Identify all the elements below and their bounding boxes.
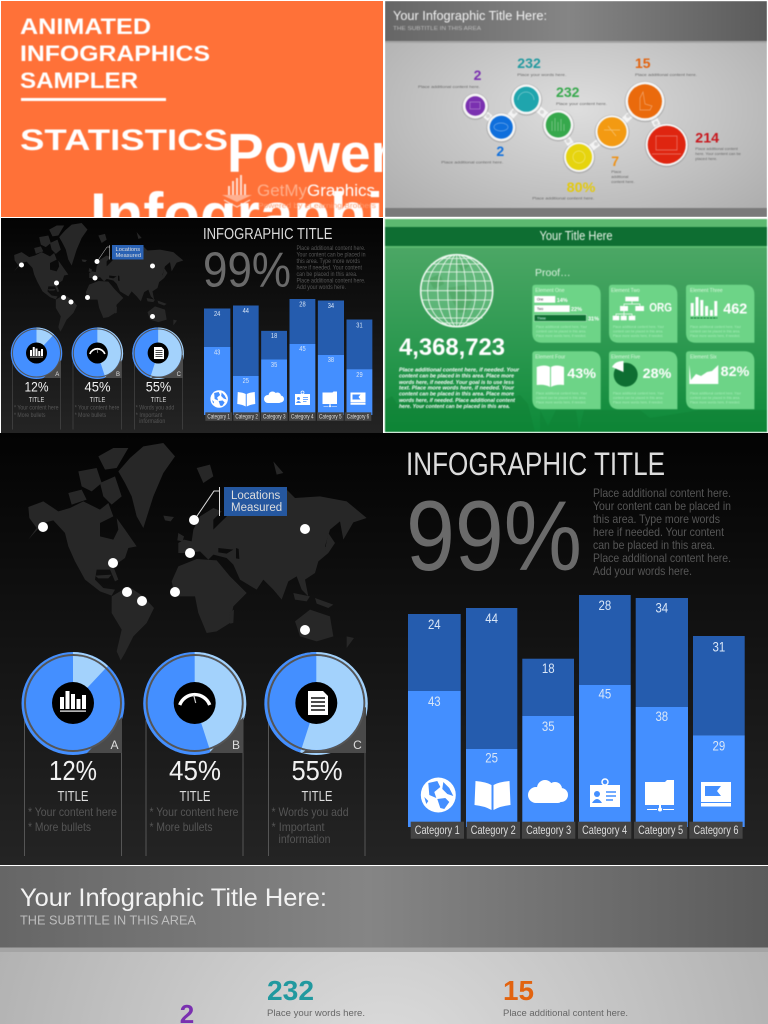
card: element four: Element Four xyxy=(535,354,566,360)
paragraph: words here, if needed. Place additional content xyxy=(399,398,515,404)
paragraph xyxy=(399,368,520,410)
label: teal 232 xyxy=(517,55,566,77)
paragraph: content can be placed in this area. Place more xyxy=(399,392,514,398)
stat B: TITLE xyxy=(180,788,210,805)
callout: locations measured xyxy=(197,487,287,516)
heading: infographic title: INFOGRAPHIC TITLE xyxy=(203,226,332,243)
label: blue 2 xyxy=(441,146,504,164)
paragraph: here if needed. Your content xyxy=(593,525,725,539)
heading: proof: Proof… xyxy=(535,267,571,279)
panel: orange title slide xyxy=(1,1,383,217)
bar chart: 25 xyxy=(485,750,498,766)
bar chart: Category 2 xyxy=(471,823,516,837)
label: orange 7 xyxy=(611,156,634,184)
label: yellow 80% xyxy=(532,182,596,200)
heading: sampler title: SAMPLER xyxy=(20,68,138,93)
paragraph: Add your words here. xyxy=(296,285,346,291)
callout: locations measured: Locations xyxy=(116,247,140,253)
panel: gray timeline slide xyxy=(385,1,767,217)
label: orange 7: 7 xyxy=(611,153,619,169)
paragraph: Place additional content here. xyxy=(593,551,731,565)
card: element six: content can be placed in this area. xyxy=(690,396,740,400)
stat A: * More bullets xyxy=(28,820,91,834)
stat C: * Words you add xyxy=(272,805,348,819)
card: element four xyxy=(532,351,601,409)
label: green 232 xyxy=(556,84,607,106)
bar chart: Category 6 xyxy=(694,823,739,837)
label: green 232: Place your content here. xyxy=(556,101,607,106)
card: element two: Place additional content here. Your xyxy=(613,325,665,329)
label: teal 232: 232 xyxy=(267,975,314,1006)
panel: dark statistics slide, large xyxy=(0,433,768,865)
stat B: * Your content here xyxy=(75,406,120,412)
bar chart: 25 xyxy=(243,378,249,385)
card: element one: Three xyxy=(537,316,546,320)
label: orange 15: 15 xyxy=(635,55,651,71)
stat C: TITLE xyxy=(151,395,166,404)
big number: 4,368,723: 4,368,723 xyxy=(399,334,505,361)
label: teal 232: Place your words here. xyxy=(267,1008,365,1018)
bar chart: 38 xyxy=(328,357,334,364)
stat B: * More bullets xyxy=(150,820,212,834)
bar chart: 43 xyxy=(214,350,220,356)
bar chart: 34 xyxy=(655,600,668,616)
label: teal 232: 232 xyxy=(517,55,541,71)
label: purple 2: 2 xyxy=(474,67,482,83)
card: element four: Place more words here, if needed. xyxy=(536,400,586,404)
card: element one: 14% xyxy=(557,298,568,304)
paragraph xyxy=(296,246,366,291)
label: red 214 xyxy=(695,129,742,161)
bar chart: 35 xyxy=(271,362,277,369)
logo: GetMyGraphics: Powered by eLearning Brothers xyxy=(258,203,377,210)
paragraph: Place additional content here. xyxy=(593,486,731,500)
paragraph: this area. Type more words xyxy=(296,259,360,265)
bar chart: Category 2 xyxy=(235,414,258,420)
stat C: TITLE xyxy=(302,788,332,805)
stat B xyxy=(143,652,246,856)
card: element one: 22% xyxy=(571,307,582,313)
heading: statistics: STATISTICS xyxy=(20,124,228,157)
stat A: * Your content here xyxy=(14,406,59,412)
card: element five: Element Five xyxy=(611,354,640,360)
stat B: B xyxy=(116,372,120,378)
card: element two: ORG xyxy=(649,301,672,315)
circles chain xyxy=(462,81,689,174)
bar chart xyxy=(408,595,745,839)
bar chart: 45 xyxy=(299,346,306,353)
logo: GetMyGraphics: GetMyGraphics xyxy=(257,181,375,200)
card: element six: Place more words here, if needed. xyxy=(690,400,740,404)
bar chart: 34 xyxy=(328,303,334,310)
stat A xyxy=(11,328,62,430)
label: red 214: 214 xyxy=(695,129,719,145)
label: green 232: 232 xyxy=(556,84,580,100)
bar chart: 44 xyxy=(243,308,249,315)
label: blue 2: Place additional content here. xyxy=(441,160,503,164)
stat C: information xyxy=(139,419,165,425)
paragraph: this area. Type more words xyxy=(593,512,720,526)
bar chart: Category 6 xyxy=(347,414,370,420)
map locations xyxy=(38,515,310,635)
paragraph xyxy=(593,486,731,578)
card: element three: Element Three xyxy=(690,288,723,294)
paragraph: Add your words here. xyxy=(593,564,692,578)
card: element two: Element Two xyxy=(611,288,640,294)
paragraph: text. Place more words here, if needed. Your xyxy=(399,386,515,392)
bar chart: 45 xyxy=(599,686,611,702)
label: red 214: Place additional content xyxy=(695,146,739,151)
bar chart: Category 4 xyxy=(582,823,627,837)
bar chart: 24 xyxy=(214,311,220,318)
slide title: Your Infographic Title Here: xyxy=(393,9,547,23)
bar chart: Category 5 xyxy=(319,414,342,420)
card: element six: Place additional content here. Your xyxy=(690,392,742,396)
stat B: * Your content here xyxy=(150,805,239,819)
bar chart: 29 xyxy=(713,738,725,754)
card: element two: Place more words here, if needed. xyxy=(613,334,663,338)
card: element four: 43% xyxy=(567,365,597,381)
card: element two xyxy=(609,285,677,343)
map locations xyxy=(19,259,155,319)
heading: infographic title: INFOGRAPHIC TITLE xyxy=(406,446,665,482)
paragraph: here. Your content can be placed in this area. xyxy=(399,404,510,410)
callout: locations measured: Measured xyxy=(231,502,282,514)
heading: sampler title: ANIMATED xyxy=(20,14,151,39)
callout: locations measured: Measured xyxy=(116,253,141,259)
title band xyxy=(385,227,767,246)
paragraph: can be placed in this area. xyxy=(593,538,715,552)
card: element one: One xyxy=(537,298,544,302)
card: element five: Place additional content here. Your xyxy=(613,392,665,396)
stat A: * More bullets xyxy=(14,413,46,419)
stat C: 55% xyxy=(292,755,342,786)
stat C xyxy=(132,327,184,430)
label: yellow 80%: 80% xyxy=(567,179,596,195)
card: element two: content can be placed in this area. xyxy=(613,330,663,334)
paragraph: Your content can be placed in xyxy=(593,499,731,513)
slide subtitle: THE SUBTITLE IN THIS AREA xyxy=(20,912,196,928)
label: red 214: here. Your content can be xyxy=(695,151,742,156)
stat C: * Important xyxy=(272,820,325,834)
stat B: 45% xyxy=(169,755,221,786)
world map xyxy=(14,223,183,332)
bar chart: 28 xyxy=(299,302,306,308)
logo: GetMyGraphics xyxy=(222,175,377,210)
paragraph: Place additional content here. xyxy=(296,246,366,252)
stat B: 45% xyxy=(84,378,110,394)
card: element five: 28% xyxy=(643,365,672,381)
bar chart: 18 xyxy=(271,333,277,340)
card: element one: Place more words here, if needed. xyxy=(536,334,586,338)
header band xyxy=(385,1,767,41)
bar chart: Category 1 xyxy=(415,823,460,837)
stat A xyxy=(22,652,124,856)
card: element six: Element Six xyxy=(690,354,717,360)
paragraph: Place additional content here. xyxy=(296,278,366,284)
bar chart: 35 xyxy=(542,718,555,734)
callout: locations measured: Locations xyxy=(231,490,280,502)
card: element one: 31% xyxy=(588,316,599,322)
stat C: * Important xyxy=(136,413,163,419)
stat C: C xyxy=(353,738,362,752)
heading: sampler title: INFOGRAPHICS xyxy=(20,41,210,66)
paragraph: Your content can be placed in xyxy=(296,252,366,258)
label: red 214: placed here. xyxy=(695,156,717,161)
panel: gray slide enlarged, cropped xyxy=(0,866,768,1024)
label: purple 2 xyxy=(418,70,482,88)
card: element three: content can be placed in this area. xyxy=(690,330,740,334)
card: element one: content can be placed in this area. xyxy=(536,330,586,334)
card: element six: 82% xyxy=(721,363,750,379)
label: orange 7: Place xyxy=(611,169,622,174)
bar chart: 18 xyxy=(542,660,555,676)
icon: wireframe globe xyxy=(421,255,493,327)
stat C: * Words you add xyxy=(136,406,174,412)
stat B: * More bullets xyxy=(75,413,106,419)
card: element five xyxy=(609,351,677,409)
label: orange 15: Place additional content here. xyxy=(635,72,697,77)
card: element three: Place additional content here. Your xyxy=(690,325,742,329)
slide subtitle: THE SUBTITLE IN THIS AREA xyxy=(393,26,481,32)
header band xyxy=(0,866,768,948)
slide title: Your Title Here xyxy=(540,229,613,243)
stat A: 12% xyxy=(49,755,97,786)
stat C xyxy=(264,652,368,856)
stat C: information xyxy=(278,832,330,846)
card: element three: 462 xyxy=(723,300,747,317)
label: teal 232: Place your words here. xyxy=(517,72,566,77)
paragraph: here if needed. Your content xyxy=(296,266,362,272)
stat C: C xyxy=(177,372,182,378)
card: element one: Place additional content here. Your xyxy=(536,325,588,329)
skyline silhouette xyxy=(385,395,767,432)
stat A: TITLE xyxy=(29,395,44,404)
stat B xyxy=(72,328,123,430)
card: element four: content can be placed in this area. xyxy=(536,396,586,400)
connector chain xyxy=(482,106,660,150)
world map xyxy=(28,443,367,660)
label: yellow 80%: Place additional content here. xyxy=(532,196,594,200)
card: element four: Place additional content here. Your xyxy=(536,392,588,396)
stat A: 12% xyxy=(24,378,48,394)
paragraph: can be placed in this area. xyxy=(296,272,358,278)
label: orange 15: Place additional content here. xyxy=(503,1008,628,1018)
card: element six xyxy=(686,351,754,409)
stat A: TITLE xyxy=(58,788,88,805)
paragraph: words here, if needed. Your goal is to use less xyxy=(399,380,514,386)
bar chart: 28 xyxy=(599,597,611,613)
card: element one xyxy=(532,285,601,343)
panel: dark statistics slide, small xyxy=(1,218,383,434)
bar chart: 44 xyxy=(485,610,498,626)
bar chart: 29 xyxy=(356,372,363,379)
paragraph: content can be placed in this area. Place more xyxy=(399,374,514,380)
bar chart: Category 4 xyxy=(291,414,314,420)
card: element five: content can be placed in this area. xyxy=(613,396,663,400)
card: element three: Place more words here, if needed. xyxy=(690,334,740,338)
stat A: A xyxy=(110,738,119,752)
card: element one: Element One xyxy=(535,288,565,294)
card: element three xyxy=(686,285,754,343)
stat A: A xyxy=(55,372,59,378)
big number: 99%: 99% xyxy=(406,480,582,591)
bar chart: 31 xyxy=(713,639,725,655)
bar chart: 24 xyxy=(428,616,441,632)
label: orange 15: 15 xyxy=(503,975,534,1006)
panel: green proof slide xyxy=(385,219,767,432)
bar chart: 43 xyxy=(428,693,441,709)
bar chart: 31 xyxy=(356,322,363,329)
bar chart: 38 xyxy=(655,708,668,724)
label: orange 7: additional xyxy=(611,174,629,179)
large word: Power: Power xyxy=(227,122,392,184)
label: orange 15 xyxy=(504,981,628,1016)
heading: sampler title xyxy=(20,14,210,93)
bar chart: Category 3 xyxy=(526,823,571,837)
stat C: 55% xyxy=(146,378,171,394)
callout: locations measured xyxy=(98,245,144,260)
stat B: TITLE xyxy=(90,395,105,404)
slide title: Your Infographic Title Here: xyxy=(20,884,327,912)
label: purple 2: Place additional content here. xyxy=(418,84,480,89)
stat A: * Your content here xyxy=(28,805,117,819)
card: element five: Place more words here, if needed. xyxy=(613,400,663,404)
bar chart: Category 3 xyxy=(263,414,286,420)
bar chart: Category 1 xyxy=(207,414,230,420)
card: element one: Two xyxy=(537,307,543,311)
big number: 99%: 99% xyxy=(203,242,291,298)
bar chart xyxy=(204,299,372,421)
label: teal 232 xyxy=(268,980,364,1018)
stat B: B xyxy=(232,738,240,752)
label: orange 15 xyxy=(634,58,696,76)
label: blue 2: 2 xyxy=(496,143,504,159)
paragraph: Place additional content here, if needed. Your xyxy=(399,368,520,374)
large word: Infographic: Infographic xyxy=(90,181,417,248)
bar chart: Category 5 xyxy=(638,823,683,837)
label: orange 7: content here. xyxy=(611,179,635,184)
